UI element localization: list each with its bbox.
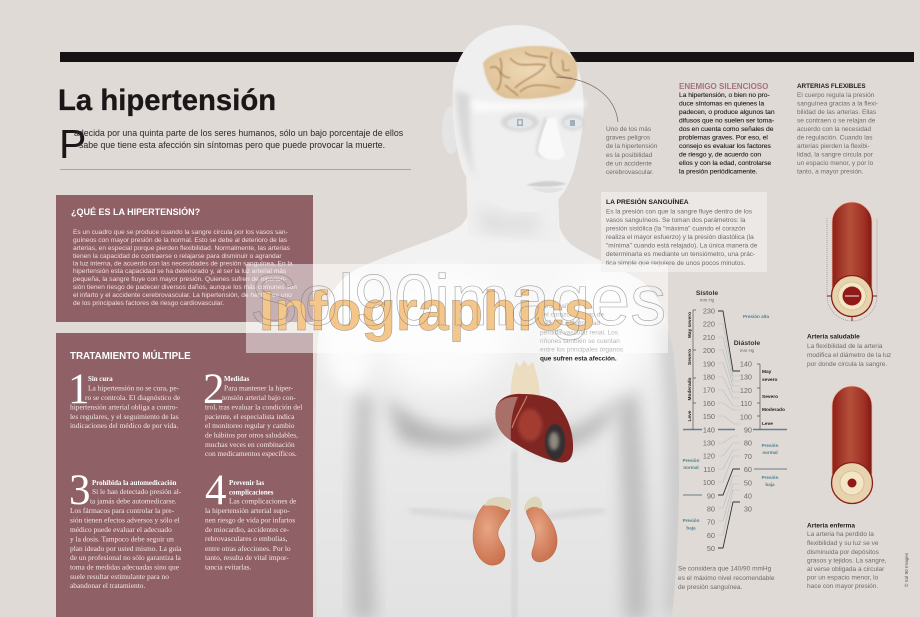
item 3: Los fármacos para controlar la pre- bbox=[70, 506, 175, 515]
text block: flexible arteries: El cuerpo regula la presión bbox=[797, 92, 875, 99]
caption: diseased artery: La arteria ha perdido la bbox=[807, 531, 874, 538]
item 2: 2 bbox=[203, 366, 224, 413]
caption: healthy artery: por donde circula la sangre. bbox=[807, 361, 887, 368]
diastolic scale: 110 bbox=[740, 399, 752, 408]
caption: diseased artery: flexibilidad y su luz se ve bbox=[807, 540, 879, 547]
item 4: Prevenir las bbox=[229, 480, 264, 487]
item 1: Sin cura bbox=[88, 376, 113, 383]
systolic scale: 130 bbox=[703, 438, 715, 448]
text block: silent enemy: la presión periódicamente. bbox=[679, 168, 758, 176]
caption: healthy artery bbox=[807, 334, 891, 368]
panel body text: sión tienen riesgo de padecer diversos daños, aunque los más comunes son bbox=[73, 284, 297, 291]
text block: silent enemy: consejo es evaluar los factores bbox=[679, 143, 771, 150]
caption: diseased artery: hace con mayor presión. bbox=[807, 583, 878, 590]
item 3: abandonar el tratamiento. bbox=[70, 581, 145, 590]
panel: blood pressure definition: realiza el mayor esfuerzo) y la presión diastólica (la bbox=[606, 234, 754, 241]
pressure range labels bbox=[683, 314, 779, 530]
chart note bbox=[678, 566, 775, 591]
watermark: Infographics: Infographics bbox=[259, 279, 595, 342]
drop cap: P bbox=[59, 121, 86, 167]
text block: flexible arteries: acuerdo con la necesidad bbox=[797, 126, 871, 133]
healthy artery bbox=[827, 202, 877, 321]
text block: kidneys note: del corazón, riesgo de bbox=[540, 312, 604, 318]
item 2: con medicamentos específicos. bbox=[205, 449, 297, 458]
caption: healthy artery: modifica el diámetro de la luz bbox=[807, 352, 891, 359]
item 2: tensión arterial bajo con- bbox=[222, 393, 296, 402]
threshold lines bbox=[683, 428, 787, 430]
item 1: 1 bbox=[68, 366, 90, 413]
text block: flexible arteries: ARTERIAS FLEXIBLES bbox=[797, 83, 866, 90]
panel body text: el infarto y el accidente cerebrovascular. La hipertensión, de hecho, es uno bbox=[73, 292, 292, 299]
watermark: Sol90images: Sol90images bbox=[250, 261, 666, 341]
diastolic severity bracket: Moderado bbox=[762, 407, 785, 413]
text block: flexible arteries: lidad, la sangre circula por bbox=[797, 152, 874, 158]
text block: silent enemy bbox=[679, 82, 775, 176]
panel: blood pressure definition: vasos sanguíneos. Se toman dos parámetros: la bbox=[606, 217, 746, 224]
text block: silent enemy: ellos y con la edad, controlarse bbox=[679, 160, 771, 167]
text block: kidneys note: pérdida vascular renal. Los bbox=[540, 330, 619, 336]
text block: silent enemy: ENEMIGO SILENCIOSO bbox=[679, 82, 768, 91]
item 1: indicaciones del médico de por vida. bbox=[70, 421, 179, 430]
connecting lines bbox=[718, 324, 740, 535]
systolic severity bracket: Moderado bbox=[687, 377, 693, 400]
caption: diseased artery: disminuida por depósitos bbox=[807, 549, 880, 556]
item 4: nen riesgo de vida por infartos bbox=[205, 516, 295, 524]
pressure range labels: normal bbox=[683, 465, 699, 470]
systolic scale: 80 bbox=[707, 504, 715, 514]
callout: brain: de un accidente bbox=[606, 160, 652, 168]
panel body text: de los principales factores de riesgo cardiovascular. bbox=[73, 300, 224, 307]
diastolic severity bracket bbox=[757, 364, 785, 430]
systolic scale: 190 bbox=[703, 359, 715, 368]
diseased artery bbox=[832, 386, 872, 504]
item 4: Las complicaciones de bbox=[229, 496, 297, 506]
left kidney bbox=[473, 503, 510, 565]
callout: brain: graves peligros bbox=[606, 134, 651, 142]
text block: kidneys note: riñones también se cuentan bbox=[540, 338, 620, 345]
diastolic scale: 80 bbox=[744, 439, 752, 448]
item 2: paciente, el especialista indica bbox=[205, 412, 295, 421]
diastolic severity bracket: severo bbox=[762, 377, 778, 383]
item 1: La hipertensión no se cura, pe- bbox=[88, 384, 180, 392]
text block: silent enemy: La hipertensión, o bien no pro- bbox=[679, 92, 770, 99]
diastolic scale: 70 bbox=[744, 452, 752, 461]
systole heading: Sístole bbox=[696, 290, 718, 297]
panel: blood pressure definition: "mínima" cuando está relajado). La única manera de bbox=[606, 242, 758, 250]
panel: blood pressure definition bbox=[601, 192, 767, 272]
pressure range labels: Presión bbox=[762, 443, 779, 448]
credit: © Sol 90 Images bbox=[903, 552, 909, 587]
systolic scale bbox=[703, 306, 715, 553]
item 2: de hábitos por otros saludables, bbox=[205, 430, 298, 440]
item 2: muchas veces en combinación bbox=[205, 440, 295, 449]
caption: diseased artery: grasos y tejidos. La sangre, bbox=[807, 558, 887, 564]
intro text: sabe que tiene esta afección sin síntomas pero que puede provocar la muerte. bbox=[79, 140, 385, 150]
text block: kidneys note: entre los principales órganos bbox=[540, 346, 624, 354]
text block: flexible arteries: bilidad de las arterias. Ellas bbox=[797, 109, 877, 116]
systolic scale: 60 bbox=[707, 531, 715, 540]
diastolic severity bracket: Leve bbox=[762, 421, 773, 427]
caption: diseased artery: por un espacio menor, lo bbox=[807, 574, 879, 582]
intro text bbox=[59, 121, 404, 167]
diastolic scale: 140 bbox=[740, 360, 752, 368]
pressure range labels: baja bbox=[686, 526, 696, 530]
chart note: Se considera que 140/90 mmHg bbox=[678, 566, 772, 572]
diastolic scale: 120 bbox=[740, 386, 752, 395]
pressure range labels: Presión alta bbox=[743, 314, 769, 319]
panel: blood pressure definition: determinarla es mediante un tensiómetro, una prác- bbox=[606, 251, 755, 258]
systolic severity bracket: Severo bbox=[687, 349, 693, 365]
systolic scale: 170 bbox=[703, 386, 715, 395]
text block: flexible arteries: se contraen o se relajan de bbox=[797, 118, 876, 124]
blood pressure chart bbox=[678, 290, 787, 591]
diastolic scale: 130 bbox=[740, 373, 752, 382]
head bbox=[453, 25, 584, 212]
panel heading: TRATAMIENTO MÚLTIPLE bbox=[70, 350, 191, 362]
intro text: adecida por una quinta parte de los seres humanos, sólo un bajo porcentaje de ellos bbox=[74, 128, 404, 138]
watermark bbox=[246, 261, 668, 353]
text block: silent enemy: duce síntomas en quienes la bbox=[679, 100, 764, 108]
text block: flexible arteries bbox=[797, 83, 878, 176]
item 1 bbox=[68, 366, 181, 430]
chart note: es el máximo nivel recomendable bbox=[678, 575, 775, 582]
item 3: 3 bbox=[69, 467, 90, 514]
panel: blood pressure definition: tica simple que requiere de unos pocos minutos. bbox=[606, 260, 746, 267]
systolic severity bracket bbox=[687, 310, 696, 430]
panel: treatment bbox=[56, 333, 313, 617]
text block: kidneys note: Otros daños bbox=[540, 303, 576, 310]
item 4: la hipertensión arterial supo- bbox=[205, 506, 290, 515]
caption: diseased artery: Arteria enferma bbox=[807, 522, 855, 530]
neck bbox=[466, 170, 560, 242]
item 3: de un profesional no sólo garantiza la bbox=[70, 553, 182, 562]
callout: brain: Uno de los más bbox=[606, 126, 652, 133]
right kidney bbox=[526, 506, 557, 562]
pressure range labels: normal bbox=[762, 450, 778, 455]
item 1: ro se controla. El diagnóstico de bbox=[85, 393, 181, 402]
item 1: les regulares, y el seguimiento de las bbox=[70, 412, 179, 421]
panel: blood pressure definition: Es la presión con que la sangre fluye dentro de los bbox=[606, 208, 753, 216]
pressure range labels: Presión bbox=[762, 475, 779, 480]
panel body text: arterias, en especial porque pierden flexibilidad. Normalmente, las arterias bbox=[73, 245, 291, 252]
systolic scale: 220 bbox=[703, 320, 715, 329]
item 4: entre otras afecciones. Por lo bbox=[205, 544, 291, 553]
diastolic scale: 100 bbox=[740, 412, 752, 421]
item 3: toma de medidas adecuadas sino que bbox=[70, 562, 180, 572]
diastolic scale: 50 bbox=[744, 478, 752, 487]
text block: flexible arteries: un espacio menor, y por lo bbox=[797, 160, 874, 167]
eyes bbox=[501, 113, 585, 131]
panel: what is hypertension bbox=[56, 195, 313, 322]
systolic scale: 70 bbox=[707, 518, 715, 527]
systolic scale: 90 bbox=[707, 491, 715, 500]
item 3: y la dosis. Tampoco debe seguir un bbox=[70, 534, 174, 544]
callout: brain: de la hipertensión bbox=[606, 143, 658, 150]
systolic severity bracket: Leve bbox=[687, 410, 693, 421]
text block: kidneys note: padecer enfermedad bbox=[540, 320, 600, 327]
item 3 bbox=[69, 467, 182, 590]
text block: kidneys note: que sufren esta afección. bbox=[540, 356, 617, 362]
item 4: tanto, resulta de vital impor- bbox=[205, 553, 289, 562]
systolic severity bracket: May severo bbox=[687, 312, 693, 338]
item 4: 4 bbox=[205, 467, 226, 514]
header bar bbox=[60, 52, 914, 62]
text block: flexible arteries: tanto, a mayor presión. bbox=[797, 168, 864, 176]
text block: silent enemy: de riesgo y, de acuerdo con bbox=[679, 152, 761, 158]
item 3: suele resultar estimulante para no bbox=[70, 572, 169, 581]
panel body text: tienen la capacidad de contraerse o relajarse para disminuir o agrandar bbox=[73, 253, 282, 260]
panel: blood pressure definition: LA PRESIÓN SANGUÍNEA bbox=[606, 197, 689, 206]
text block: silent enemy: problemas graves. Por eso, el bbox=[679, 134, 768, 142]
item 2: el monitoreo regular y cambio bbox=[205, 421, 295, 430]
pressure range labels: Presión bbox=[683, 518, 700, 523]
panel: blood pressure definition: presión sistólica (la "máxima" cuando el corazón bbox=[606, 226, 746, 232]
systolic scale: 150 bbox=[703, 412, 715, 421]
text block: flexible arteries: arterias pierden la flexibi- bbox=[797, 143, 870, 150]
caption: diseased artery: al verse obligada a circular bbox=[807, 566, 885, 573]
caption: diseased artery bbox=[807, 522, 887, 590]
systolic scale: 160 bbox=[703, 399, 715, 408]
callout: brain bbox=[556, 77, 658, 176]
diastolic scale: 60 bbox=[744, 465, 752, 474]
item 3: sión tienen efectos adversos y sólo el bbox=[70, 516, 180, 524]
systolic scale: 50 bbox=[707, 544, 715, 553]
item 2 bbox=[203, 366, 302, 458]
systolic scale: 120 bbox=[703, 452, 715, 461]
diastolic scale: 90 bbox=[744, 426, 752, 434]
kidneys bbox=[473, 497, 557, 565]
item 1: hipertensión arterial obliga a contro- bbox=[70, 402, 178, 412]
systolic scale: 230 bbox=[703, 306, 715, 316]
caption: healthy artery: Arteria saludable bbox=[807, 334, 860, 340]
blood pressure chart: mm Hg bbox=[740, 348, 755, 353]
text block: kidneys note bbox=[540, 303, 624, 362]
title: La hipertensión bbox=[58, 84, 276, 117]
callout: brain: es la posibilidad bbox=[606, 152, 653, 159]
item 3: ta jamás debe automedicarse. bbox=[90, 496, 177, 506]
panel body text: Es un cuadro que se produce cuando la sangre circula por los vasos san- bbox=[73, 229, 288, 236]
item 2: Para mantener la hiper- bbox=[224, 384, 294, 392]
item 4: complicaciones bbox=[229, 490, 274, 496]
blood pressure chart: mm Hg bbox=[700, 298, 715, 302]
diastole heading: Diástole bbox=[734, 340, 760, 347]
panel body text bbox=[73, 229, 297, 307]
ear bbox=[442, 106, 460, 154]
diastolic scale: 30 bbox=[744, 505, 752, 514]
panel body text: hipertensión esta capacidad se ha deteriorado y, al ser la luz arterial más bbox=[73, 268, 287, 275]
dashed flexibility outline bbox=[827, 218, 877, 321]
text block: flexible arteries: de regulación. Cuando las bbox=[797, 134, 873, 142]
item 2: Medidas bbox=[224, 376, 250, 383]
chart note: de presión sanguínea. bbox=[678, 584, 743, 591]
systolic scale: 180 bbox=[703, 372, 715, 382]
item 3: Prohibida la automedicación bbox=[92, 480, 177, 487]
caption: healthy artery: La flexibilidad de la arteria bbox=[807, 343, 883, 350]
item 3: médico puede evaluar el adecuado bbox=[70, 525, 172, 534]
text block: silent enemy: padecen, o produce algunos tan bbox=[679, 109, 775, 116]
diastolic scale bbox=[740, 360, 752, 514]
systolic scale: 210 bbox=[703, 333, 715, 342]
systolic scale: 200 bbox=[703, 346, 715, 355]
item 3: Si le han detectado presión al- bbox=[92, 487, 182, 496]
text block: flexible arteries: sanguínea gracias a la flexi- bbox=[797, 100, 878, 108]
brain bbox=[483, 46, 578, 99]
diastolic severity bracket: May bbox=[762, 369, 772, 375]
item 2: trol, tras evaluar la condición del bbox=[205, 402, 302, 412]
item 4: de miocardio, accidentes ce- bbox=[205, 525, 290, 534]
item 4: tancia evitarlas. bbox=[205, 562, 252, 572]
item 3: plan ideado por usted mismo. La guía bbox=[70, 544, 182, 553]
systolic scale: 140 bbox=[703, 425, 715, 434]
panel heading: ¿QUÉ ES LA HIPERTENSIÓN? bbox=[71, 206, 200, 217]
item 4: rebrovasculares o embolias, bbox=[205, 534, 287, 543]
systolic scale: 100 bbox=[703, 478, 715, 487]
panel body text: pequeña, la sangre fluye con mayor presión. Quienes sufren de hiperten- bbox=[73, 276, 287, 283]
panel body text: la luz interna, de acuerdo con las necesidades de presión sanguínea. En la bbox=[73, 260, 293, 268]
nose and mouth bbox=[526, 118, 567, 193]
pressure range labels: baja bbox=[765, 482, 775, 487]
systolic scale: 110 bbox=[703, 465, 715, 474]
text block: silent enemy: difusos que no suelen ser toma- bbox=[679, 118, 774, 124]
diastolic scale: 40 bbox=[744, 492, 752, 500]
panel body text: guíneos con mayor presión de la normal. Esto se debe al deterioro de las bbox=[73, 237, 288, 244]
callout: brain: cerebrovascular. bbox=[606, 169, 654, 176]
pressure range labels: Presión bbox=[683, 458, 700, 463]
diastolic severity bracket: Severo bbox=[762, 394, 778, 400]
heart bbox=[495, 360, 573, 462]
human figure bbox=[300, 25, 700, 617]
item 4 bbox=[205, 467, 297, 572]
text block: silent enemy: dos en cuenta como señales de bbox=[679, 126, 774, 133]
torso and arms bbox=[315, 216, 679, 617]
